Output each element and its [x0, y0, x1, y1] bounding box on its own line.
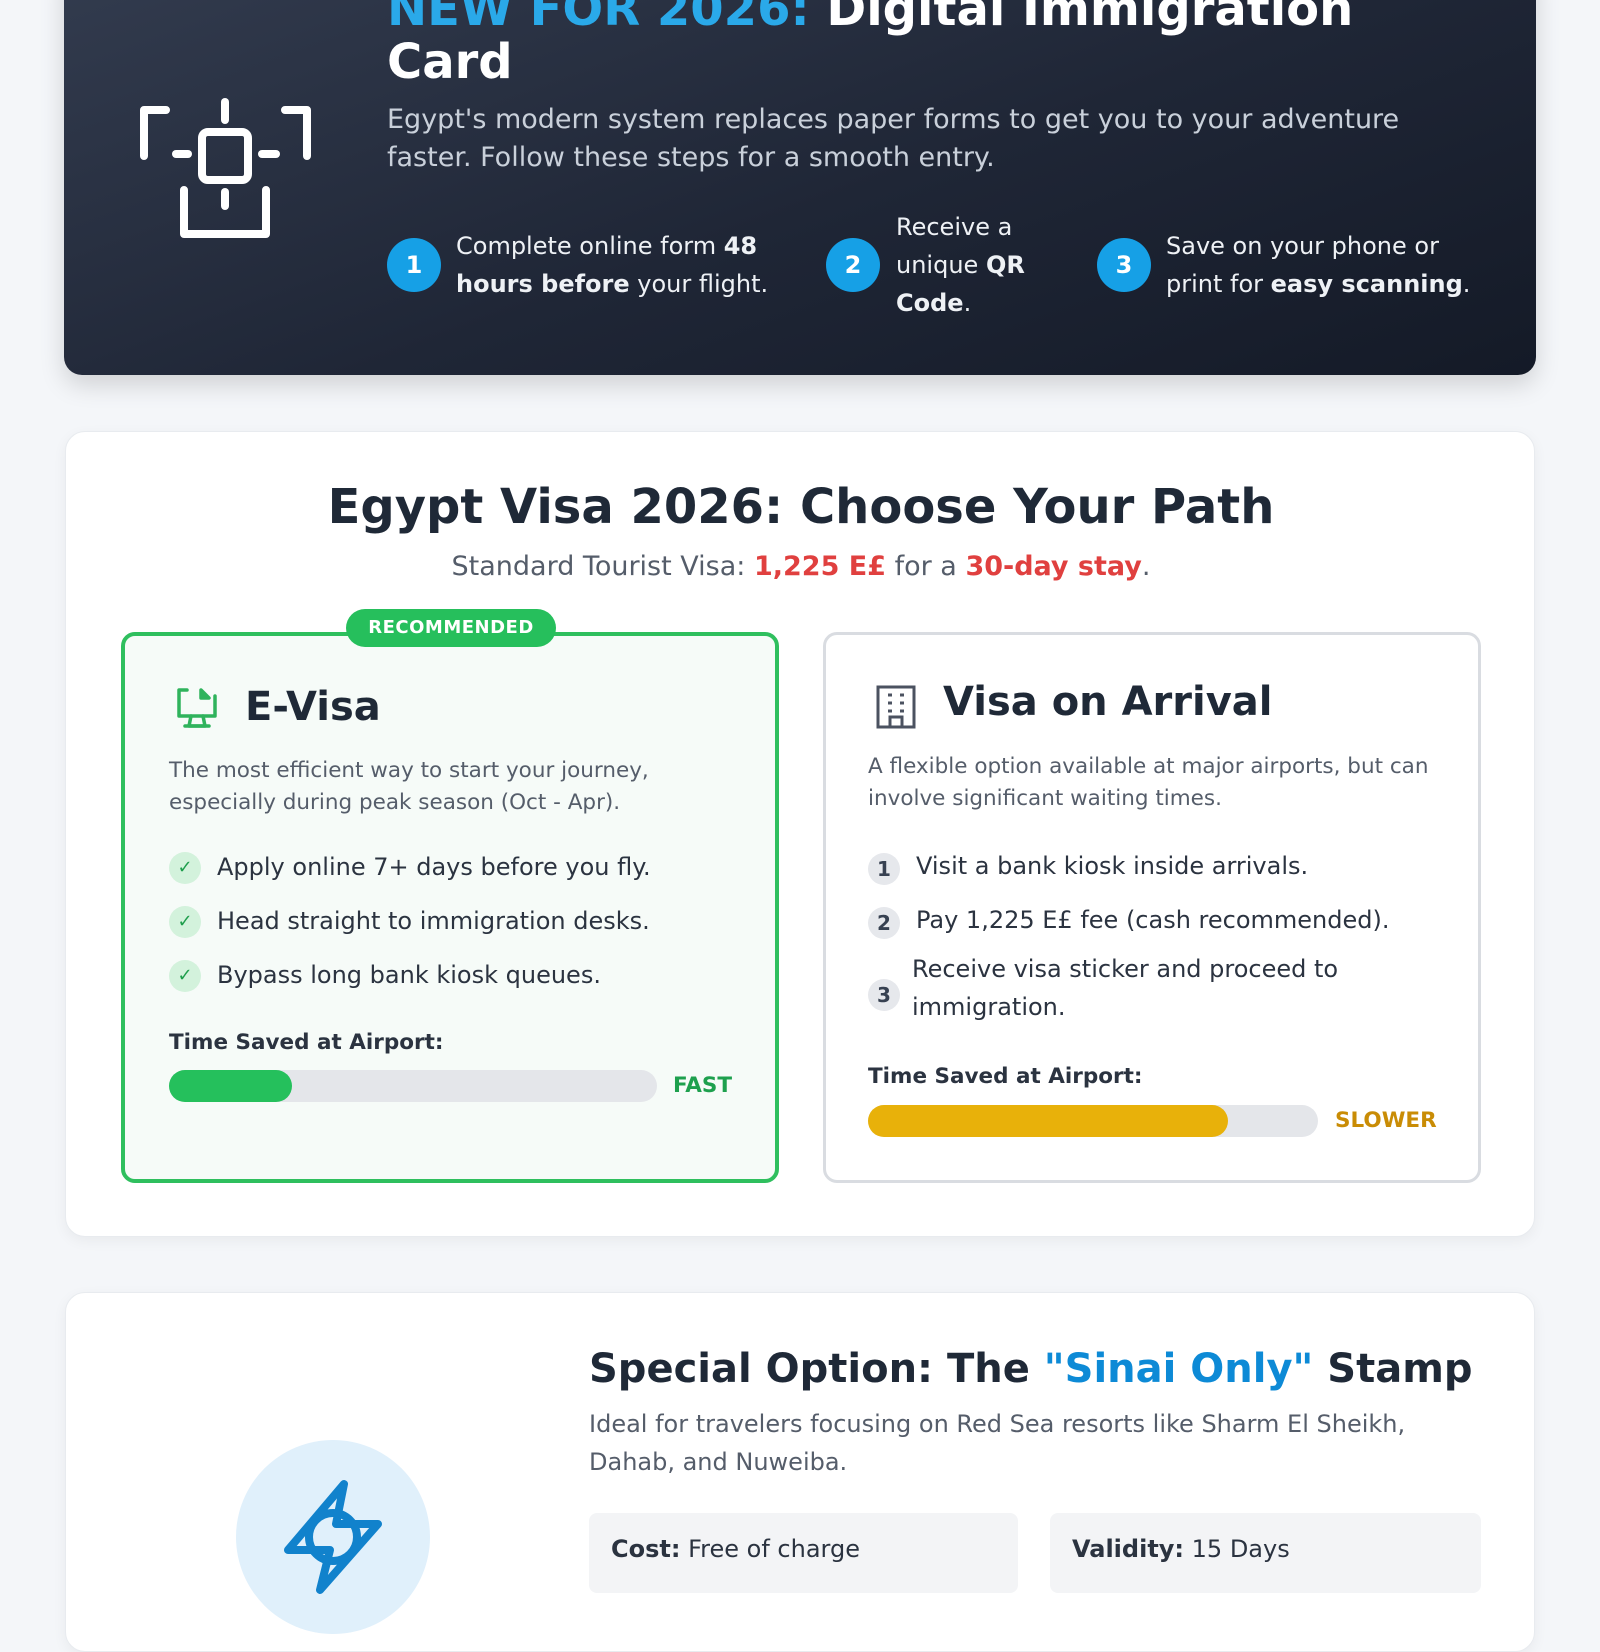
- step 3: Save on your phone or print for easy scanning.: [1166, 232, 1470, 298]
- badge: recommended: [346, 609, 556, 647]
- checklist: Head straight to immigration desks.: [217, 907, 650, 935]
- heading: e-visa: E-Visa: [245, 684, 381, 730]
- steps list: Receive visa sticker and proceed to immigration.: [912, 955, 1338, 1021]
- bar chart: fast: FAST: [673, 1073, 732, 1098]
- step 2: [826, 213, 1025, 317]
- step 2: 2: [845, 251, 861, 279]
- checklist: Bypass long bank kiosk queues.: [217, 961, 601, 989]
- heading: visa on arrival: Visa on Arrival: [943, 679, 1272, 725]
- step 2: Receive a unique QR Code.: [896, 213, 1025, 317]
- steps list: 2: [877, 911, 891, 935]
- checklist: ✓: [177, 857, 193, 878]
- panel: sinai only stamp: [65, 1292, 1535, 1652]
- heading: Special Option: The "Sinai Only" Stamp: [589, 1346, 1473, 1392]
- info box: cost: [589, 1513, 1018, 1593]
- step 1: Complete online form 48 hours before your flight.: [456, 232, 768, 298]
- steps list: 3: [877, 983, 891, 1007]
- checklist: [169, 852, 651, 992]
- info box: validity: [1050, 1513, 1481, 1593]
- badge: recommended: RECOMMENDED: [368, 617, 534, 638]
- icon: lightning in circle: [236, 1440, 430, 1634]
- bar chart: fast: [169, 1070, 732, 1102]
- steps list: Visit a bank kiosk inside arrivals.: [916, 852, 1308, 880]
- steps list: [868, 852, 1390, 1021]
- icon: building: [876, 686, 916, 728]
- text block: The most efficient way to start your journey, especially during peak season (Oct - Apr).: [169, 758, 649, 815]
- bar chart: slower: SLOWER: [1335, 1108, 1437, 1133]
- step 3: 3: [1116, 251, 1132, 279]
- steps list: 1: [877, 857, 891, 881]
- checklist: Apply online 7+ days before you fly.: [217, 853, 651, 881]
- text block: A flexible option available at major airports, but can involve significant waiting times.: [868, 754, 1428, 811]
- panel: visa on arrival: [823, 632, 1481, 1183]
- text block: intro: Egypt's modern system replaces paper forms to get you to your adventure faster. Follow these steps for a smooth entry.: [387, 104, 1399, 173]
- panel: digital immigration card: [64, 0, 1536, 375]
- icon: scan frame: [140, 98, 311, 238]
- steps list: Pay 1,225 E£ fee (cash recommended).: [916, 906, 1390, 934]
- panel: e-visa: [121, 632, 779, 1183]
- label: time saved: Time Saved at Airport:: [868, 1064, 1142, 1089]
- bar chart: slower: [868, 1105, 1437, 1137]
- subtitle: Standard Tourist Visa: 1,225 E£ for a 30-day stay.: [452, 551, 1150, 582]
- panel: choose your path: [65, 431, 1535, 1237]
- step 1: 1: [406, 251, 422, 279]
- text block: Ideal for travelers focusing on Red Sea resorts like Sharm El Sheikh, Dahab, and Nuweiba.: [589, 1410, 1405, 1476]
- icon: monitor: [177, 688, 217, 728]
- checklist: ✓: [177, 911, 193, 932]
- info box: validity: Validity: 15 Days: [1072, 1535, 1290, 1563]
- label: time saved: Time Saved at Airport:: [169, 1030, 444, 1055]
- heading: Egypt Visa 2026: Choose Your Path: [328, 479, 1274, 535]
- info box: cost: Cost: Free of charge: [611, 1535, 860, 1563]
- checklist: ✓: [177, 965, 193, 986]
